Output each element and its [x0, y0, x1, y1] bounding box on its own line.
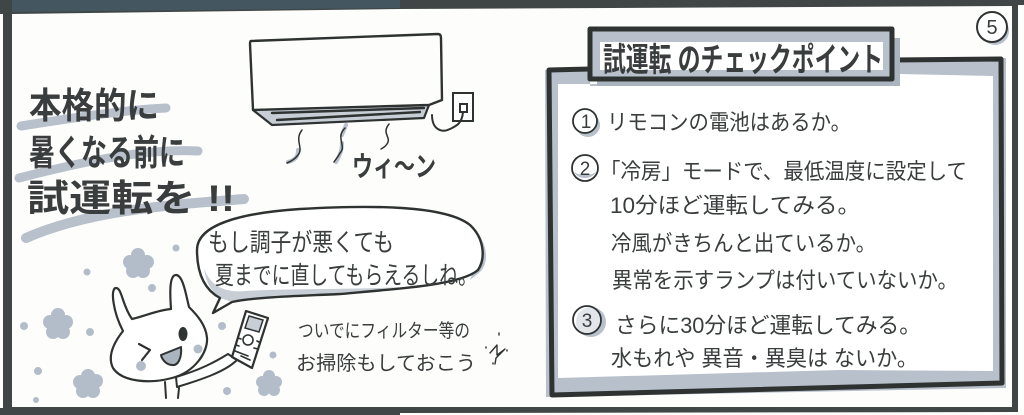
note: clean the filter too: お掃除もしておこう: [296, 352, 476, 375]
arm: [176, 354, 237, 387]
heading: start test run before it gets hot: 試運転を !!: [27, 178, 235, 219]
check item 2: 10分ほど運転してみる。: [610, 193, 860, 218]
check item 1: 1: [581, 112, 591, 133]
eye: [178, 327, 188, 341]
heading: start test run before it gets hot: [19, 85, 244, 238]
heading: start test run before it gets hot: 暑くなる前に: [29, 132, 185, 173]
flower bottom right: [256, 370, 282, 396]
panel heading: [590, 29, 900, 86]
decoration: flowers and dots: [20, 244, 282, 403]
sparkle: [486, 333, 507, 364]
page number badge: 5: [986, 17, 998, 39]
mouth: [161, 347, 181, 365]
check item 3: 3: [582, 311, 592, 332]
speech bubble: もし調子が悪くても: [208, 229, 394, 257]
check item 3: さらに30分ほど運転してみる。: [615, 313, 921, 338]
sound effect: ウィ〜ン: [352, 151, 436, 182]
note: clean the filter too: [296, 320, 507, 375]
note: clean the filter too: ついでにフィルター等の: [298, 320, 470, 342]
panel heading: 試運転 のチェックポイント: [603, 41, 883, 78]
remote control: [232, 311, 268, 368]
heading: start test run before it gets hot: 本格的に: [29, 85, 159, 126]
flower top: [123, 248, 154, 278]
speech bubble: [197, 207, 486, 313]
check item 2: 冷風がきちんと出ているか。: [611, 231, 876, 256]
check item 1: リモコンの電池はあるか。: [607, 110, 851, 135]
air outlet and cord: [432, 93, 473, 131]
page number badge: [977, 12, 1009, 45]
panel: check points: [545, 29, 1006, 397]
check item 2: 2: [580, 159, 590, 180]
speech bubble: 夏までに直してもらえるしね。: [215, 262, 477, 290]
check item 3: 水もれや 異音・異臭は ないか。: [611, 346, 918, 371]
check item 2: 異常を示すランプは付いていないか。: [612, 268, 958, 293]
check item 2: 「冷房」モードで、最低温度に設定して: [600, 159, 967, 184]
flower bottom left: [73, 369, 103, 398]
winking eye: [139, 344, 150, 360]
character: rabbit with remote: [111, 275, 268, 398]
air flow lines: [287, 124, 389, 163]
flower left: [43, 308, 73, 339]
illustration: air conditioner: [250, 34, 473, 163]
check item 2: [572, 155, 967, 293]
check item 3: [573, 306, 921, 371]
